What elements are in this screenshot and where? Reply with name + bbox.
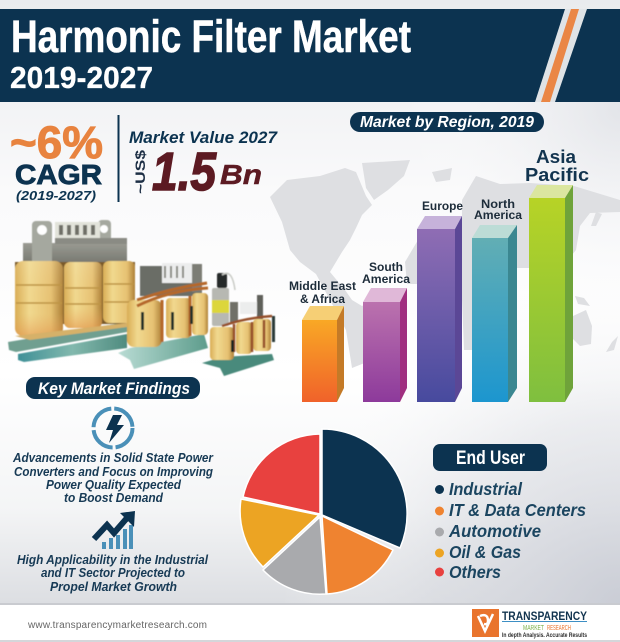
CAGR stat: (2019-2027) xyxy=(16,188,96,203)
bar: Europe: Europe xyxy=(422,199,463,213)
logo: RESEARCH xyxy=(547,623,571,632)
finding 1 text: to Boost Demand xyxy=(64,491,163,505)
legend: end user xyxy=(435,479,586,582)
heading: key market findings: Key Market Findings xyxy=(38,379,190,398)
pie chart: end user xyxy=(240,429,407,594)
subtitle years: 2019-2027 xyxy=(10,60,153,95)
medium filter xyxy=(118,263,208,369)
legend item: Automotive: Automotive xyxy=(448,521,541,541)
bar: South America: America xyxy=(362,272,410,286)
small filter with capacitor xyxy=(202,273,275,376)
large filter xyxy=(8,220,135,362)
CAGR stat: CAGR xyxy=(15,159,102,190)
legend item: IT & Data Centers: IT & Data Centers xyxy=(449,500,586,520)
market value stat: Market Value 2027 xyxy=(129,128,279,147)
logo xyxy=(472,609,588,639)
bar: Europe xyxy=(417,199,463,402)
logo: TRANSPARENCY xyxy=(502,609,587,623)
finding 1 text: Advancements in Solid State Power xyxy=(12,451,214,465)
icon: lightning bolt xyxy=(94,408,132,448)
bar chart: market by region xyxy=(289,147,589,402)
bar: South America: South xyxy=(369,260,403,274)
market value stat: 1.5 xyxy=(152,142,217,202)
market value stat: Bn xyxy=(220,159,262,190)
finding 1 text xyxy=(12,451,214,505)
icon: rising growth chart xyxy=(94,511,135,549)
heading: market by region: Market by Region, 2019 xyxy=(360,114,534,131)
bar: South America xyxy=(362,260,410,402)
bar: Asia Pacific xyxy=(525,147,589,402)
finding 2 text: High Applicability in the Industrial xyxy=(17,553,208,567)
bar: North America xyxy=(472,197,522,402)
logo: MARKET xyxy=(523,623,544,632)
bar: North America: America xyxy=(474,208,522,222)
bar: Asia Pacific: Pacific xyxy=(525,165,589,185)
finding 2 text: and IT Sector Projected to xyxy=(41,566,185,580)
footer xyxy=(0,603,620,642)
bar: North America: North xyxy=(481,197,515,211)
market value stat: ~US$ xyxy=(132,150,148,194)
logo: In depth Analysis. Accurate Results xyxy=(502,633,588,639)
legend item: Others: Others xyxy=(449,562,501,582)
bar: Middle East & Africa xyxy=(289,279,356,402)
market value stat xyxy=(129,128,279,202)
finding 2 text xyxy=(17,553,208,594)
world map backdrop xyxy=(270,160,620,368)
heading: end user: End User xyxy=(456,448,525,469)
finding 1 text: Power Quality Expected xyxy=(46,478,181,492)
CAGR stat xyxy=(10,117,103,203)
legend item: Industrial: Industrial xyxy=(449,479,523,499)
legend item: Oil & Gas: Oil & Gas xyxy=(449,542,521,562)
CAGR stat: ~6% xyxy=(10,117,103,168)
finding 2 text: Propel Market Growth xyxy=(50,580,177,594)
title: Harmonic Filter Market xyxy=(11,11,411,62)
header banner xyxy=(0,9,620,102)
transformer product photo xyxy=(8,220,275,376)
bar: Middle East & Africa: Middle East xyxy=(289,279,356,293)
bar: Asia Pacific: Asia xyxy=(536,147,577,167)
bar: Middle East & Africa: & Africa xyxy=(300,292,345,306)
website url: www.transparencymarketresearch.com xyxy=(27,620,207,631)
finding 1 text: Converters and Focus on Improving xyxy=(14,465,213,479)
heading: end user xyxy=(433,444,547,471)
